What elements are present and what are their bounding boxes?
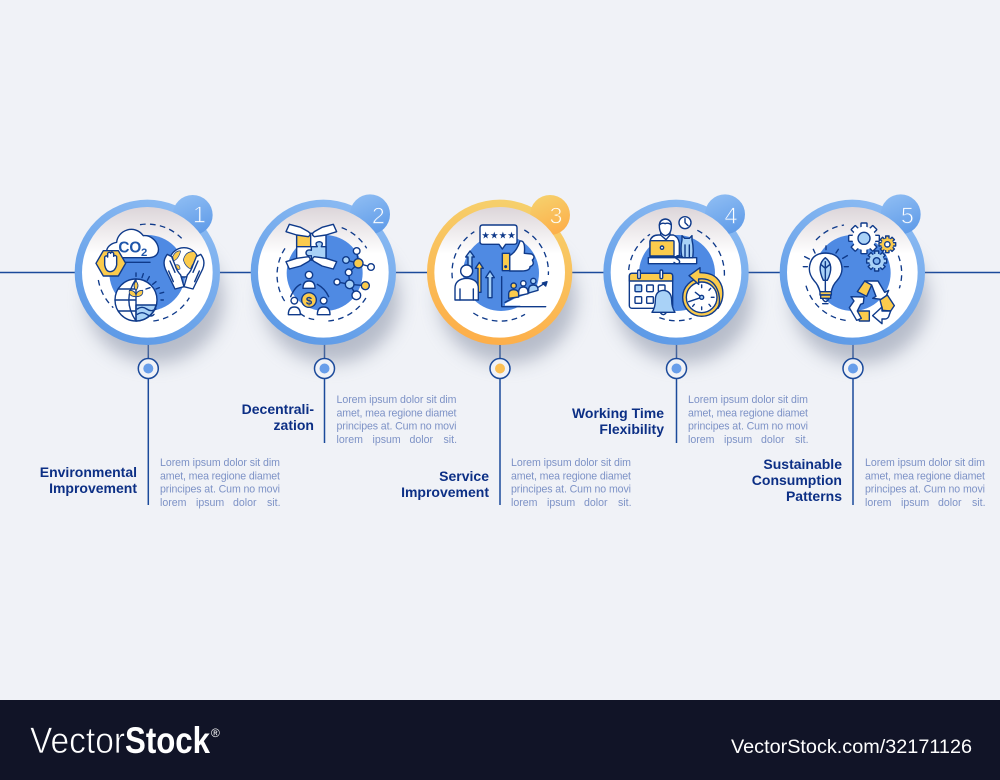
body text 2: principes at. Cum no movi [336, 420, 456, 432]
connector 5 [852, 340, 854, 505]
icon: recycling arrows [849, 281, 894, 324]
body text 5: lorem [865, 497, 892, 509]
icon: network nodes [334, 248, 374, 300]
heading 3 [401, 468, 489, 500]
marker dot 5 [843, 358, 863, 378]
body text 2: Lorem ipsum dolor sit dim [336, 394, 457, 406]
footer image id: VectorStock.com/32171126 [731, 737, 972, 758]
body text 5: sit. [972, 497, 986, 509]
heading 4: Working Time [572, 405, 664, 421]
heading 4 [572, 405, 664, 437]
step 2: decentralization [242, 194, 457, 446]
body text 4: dolor [761, 434, 785, 446]
heading 2: Decentrali- [242, 401, 314, 417]
footer bar [0, 700, 1000, 780]
body text 1: amet, mea regione diamet [160, 470, 280, 482]
body text 3: ipsum [547, 497, 575, 509]
body text 5: dolor [938, 497, 962, 509]
marker dot 1 [138, 358, 158, 378]
timeline line [0, 272, 1000, 274]
icon: growth chart with team [502, 277, 547, 307]
heading 2: zation [274, 417, 314, 433]
step 3: service improvement [401, 195, 632, 509]
body text 5: ipsum [901, 497, 929, 509]
footer logo [30, 720, 220, 761]
body text 1: ipsum [196, 497, 224, 509]
heading 1 [40, 464, 137, 496]
body text 2: ipsum [372, 434, 401, 446]
heading 3: Improvement [401, 484, 489, 500]
heading 5: Consumption [752, 472, 842, 488]
body text 1: sit. [267, 497, 281, 509]
body text 5: amet, mea regione diamet [865, 470, 985, 482]
heading 5: Sustainable [763, 456, 842, 472]
body text 3: principes at. Cum no movi [511, 484, 631, 496]
body text 2 [336, 394, 457, 446]
body text 3: Lorem ipsum dolor sit dim [511, 457, 631, 469]
circle badge 1 [75, 195, 223, 363]
footer logo: Vector [30, 720, 125, 761]
body text 3: dolor [584, 497, 608, 509]
body text 1: principes at. Cum no movi [160, 484, 280, 496]
body text 5 [865, 457, 986, 509]
connector 4 [676, 340, 678, 443]
body text 3: amet, mea regione diamet [511, 470, 631, 482]
body text 4 [688, 394, 809, 446]
icon: thumbs up [502, 241, 534, 271]
body text 2: sit. [444, 434, 457, 446]
body text 4: Lorem ipsum dolor sit dim [688, 394, 808, 406]
body text 4: amet, mea regione diamet [688, 408, 808, 420]
body text 1: lorem [160, 497, 187, 509]
icon: rating bubble: ★★★★ [481, 230, 516, 240]
marker dot 3 [490, 358, 510, 378]
icon: CO2 cloud and stop hand [96, 229, 158, 276]
body text 4: sit. [795, 434, 809, 446]
heading 1: Environmental [40, 464, 137, 480]
icon: light bulb with leaf [803, 246, 848, 304]
icon: CO2 cloud and stop hand: 2 [141, 247, 147, 259]
step 4: working time flexibility [572, 194, 809, 446]
icon: remote worker with cat [648, 217, 697, 264]
body text 3: sit. [618, 497, 632, 509]
body text 4: ipsum [724, 434, 752, 446]
body text 2: lorem [336, 434, 363, 446]
icon: CO2 cloud and stop hand: CO [118, 240, 141, 257]
marker dot 2 [314, 358, 334, 378]
circle badge 3: 3 [550, 202, 562, 228]
body text 1: Lorem ipsum dolor sit dim [160, 457, 280, 469]
circle badge 4 [603, 194, 752, 363]
step 1: environmental improvement [40, 195, 281, 509]
body text 3: lorem [511, 497, 538, 509]
icon: people and money [288, 271, 330, 315]
body text 3 [511, 457, 632, 509]
circle badge 1: 1 [193, 201, 206, 227]
circle badge 2 [251, 194, 399, 363]
body text 2: dolor [410, 434, 434, 446]
icon: clock with return arrow [683, 268, 723, 316]
icon: calendar with bell [629, 270, 675, 315]
circle badge 5: 5 [901, 202, 914, 228]
icon: globe in hands [164, 248, 204, 289]
heading 5: Patterns [786, 488, 842, 504]
connector 2 [324, 340, 326, 443]
heading 4: Flexibility [599, 421, 664, 437]
circle badge 5 [780, 194, 928, 363]
body text 4: lorem [688, 434, 715, 446]
footer logo: ® [211, 726, 220, 740]
heading 1: Improvement [49, 480, 137, 496]
heading 3: Service [439, 468, 489, 484]
connector 3 [499, 340, 501, 505]
body text 5: principes at. Cum no movi [865, 484, 985, 496]
icon: person and arrows [455, 251, 494, 300]
circle badge 4: 4 [725, 202, 738, 228]
body text 4: principes at. Cum no movi [688, 420, 808, 432]
icon: hands with puzzle [286, 224, 337, 269]
connector 1 [147, 340, 149, 505]
body text 1: dolor [233, 497, 257, 509]
icon: gears [849, 223, 896, 271]
circle badge 2: 2 [372, 202, 385, 228]
body text 2: amet, mea regione diamet [336, 408, 457, 420]
heading 5 [752, 456, 842, 504]
icon: rating bubble [480, 225, 517, 249]
heading 2 [242, 401, 314, 433]
icon: earth with plant and water [115, 273, 164, 321]
body text 1 [160, 457, 281, 509]
icon: people and money: $ [306, 295, 313, 307]
step 5: sustainable consumption patterns [752, 194, 986, 509]
circle badge 3 [427, 195, 576, 363]
footer logo: Stock [125, 720, 210, 761]
marker dot 4 [666, 358, 686, 378]
body text 5: Lorem ipsum dolor sit dim [865, 457, 985, 469]
